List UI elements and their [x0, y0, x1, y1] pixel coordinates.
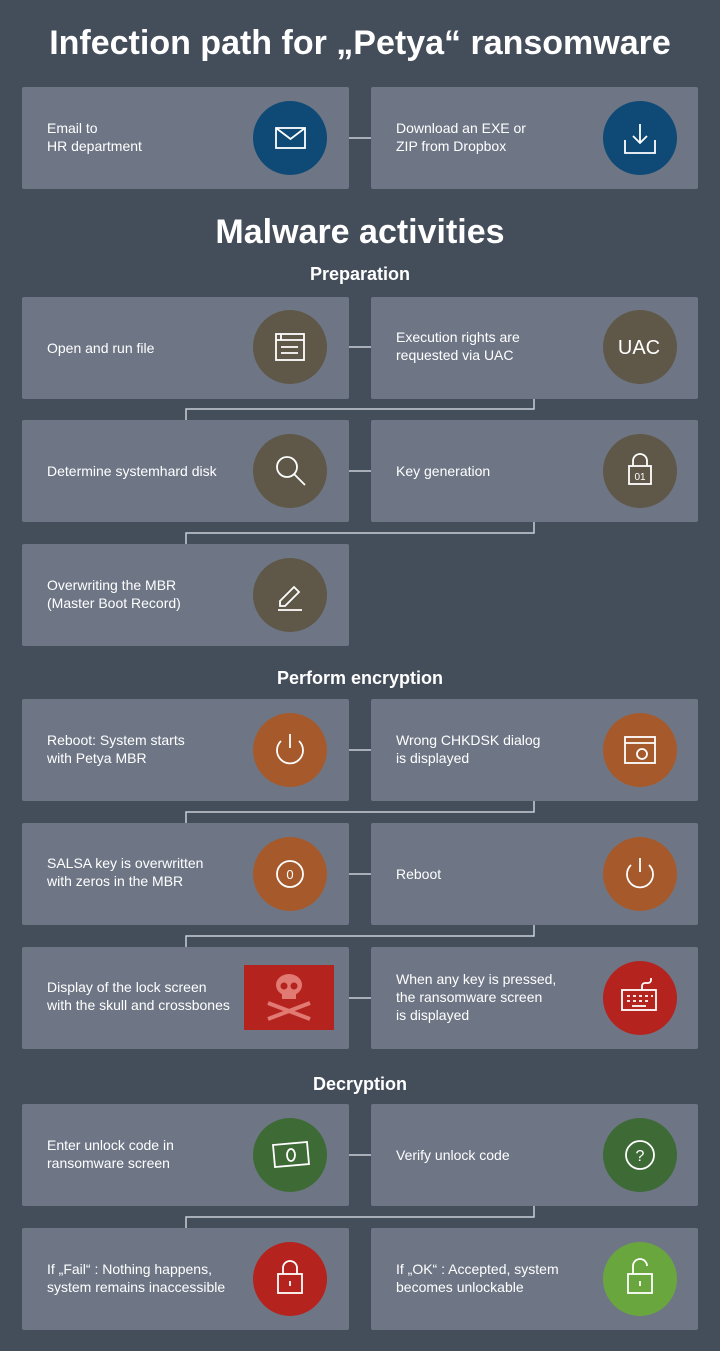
card: email: HR department — [47, 138, 142, 154]
card: CHKDSK — [371, 699, 698, 801]
title: Infection path for „Petya“ ransomware — [49, 24, 671, 62]
card: download: ZIP from Dropbox — [396, 138, 506, 154]
card: SALSA: with zeros in the MBR — [46, 873, 183, 889]
card: verify: ? — [636, 1148, 645, 1165]
heading: perform encryption: Perform encryption — [277, 668, 443, 688]
connector lines — [186, 138, 534, 1228]
card: CHKDSK: Wrong CHKDSK dialog — [396, 732, 540, 748]
card: MBR: Overwriting the MBR — [47, 577, 176, 593]
card: open and run: Open and run file — [47, 340, 155, 356]
card: any key: is displayed — [396, 1007, 469, 1023]
card: lock screen: with the skull and crossbones — [46, 997, 230, 1013]
card: determine disk — [22, 420, 349, 522]
card: UAC — [371, 297, 698, 399]
card: reboot: Reboot — [396, 866, 441, 882]
card: verify — [371, 1104, 698, 1206]
card: fail: If „Fail“ : Nothing happens, — [47, 1261, 212, 1277]
card: any key — [371, 947, 698, 1049]
card: ok — [371, 1228, 698, 1330]
card: key generation: 01 — [634, 472, 646, 483]
card: email: Email to — [47, 120, 98, 136]
heading: malware activities: Malware activities — [215, 213, 505, 251]
heading: decryption: Decryption — [313, 1074, 407, 1094]
card: CHKDSK: is displayed — [396, 750, 469, 766]
card: key generation — [371, 420, 698, 522]
card: enter code — [22, 1104, 349, 1206]
card: verify: Verify unlock code — [396, 1147, 510, 1163]
card: any key: the ransomware screen — [396, 989, 542, 1005]
card: determine disk: Determine systemhard disk — [47, 463, 218, 479]
card: SALSA: 0 — [286, 867, 294, 882]
card: reboot petya: with Petya MBR — [46, 750, 147, 766]
card: open and run — [22, 297, 349, 399]
card: UAC: UAC — [618, 337, 660, 359]
card: ok: becomes unlockable — [396, 1279, 524, 1295]
card: SALSA: SALSA key is overwritten — [47, 855, 203, 871]
card: UAC: requested via UAC — [396, 347, 514, 363]
card: lock screen: Display of the lock screen — [47, 979, 207, 995]
card: key generation: Key generation — [396, 463, 490, 479]
card: email — [22, 87, 349, 189]
card: enter code: Enter unlock code in — [47, 1137, 174, 1153]
card: MBR: (Master Boot Record) — [47, 595, 181, 611]
card: download: Download an EXE or — [396, 120, 526, 136]
card: download — [371, 87, 698, 189]
card: any key: When any key is pressed, — [396, 971, 556, 987]
card: MBR — [22, 544, 349, 646]
card: ok: If „OK“ : Accepted, system — [396, 1261, 559, 1277]
card: fail: system remains inaccessible — [47, 1279, 225, 1295]
card: reboot — [371, 823, 698, 925]
card: reboot petya: Reboot: System starts — [47, 732, 185, 748]
card: fail — [22, 1228, 349, 1330]
card: SALSA — [22, 823, 349, 925]
card: UAC: Execution rights are — [396, 329, 520, 345]
card: reboot petya — [22, 699, 349, 801]
card: lock screen — [22, 947, 349, 1049]
heading: preparation: Preparation — [310, 264, 410, 284]
card: enter code: ransomware screen — [47, 1155, 170, 1171]
